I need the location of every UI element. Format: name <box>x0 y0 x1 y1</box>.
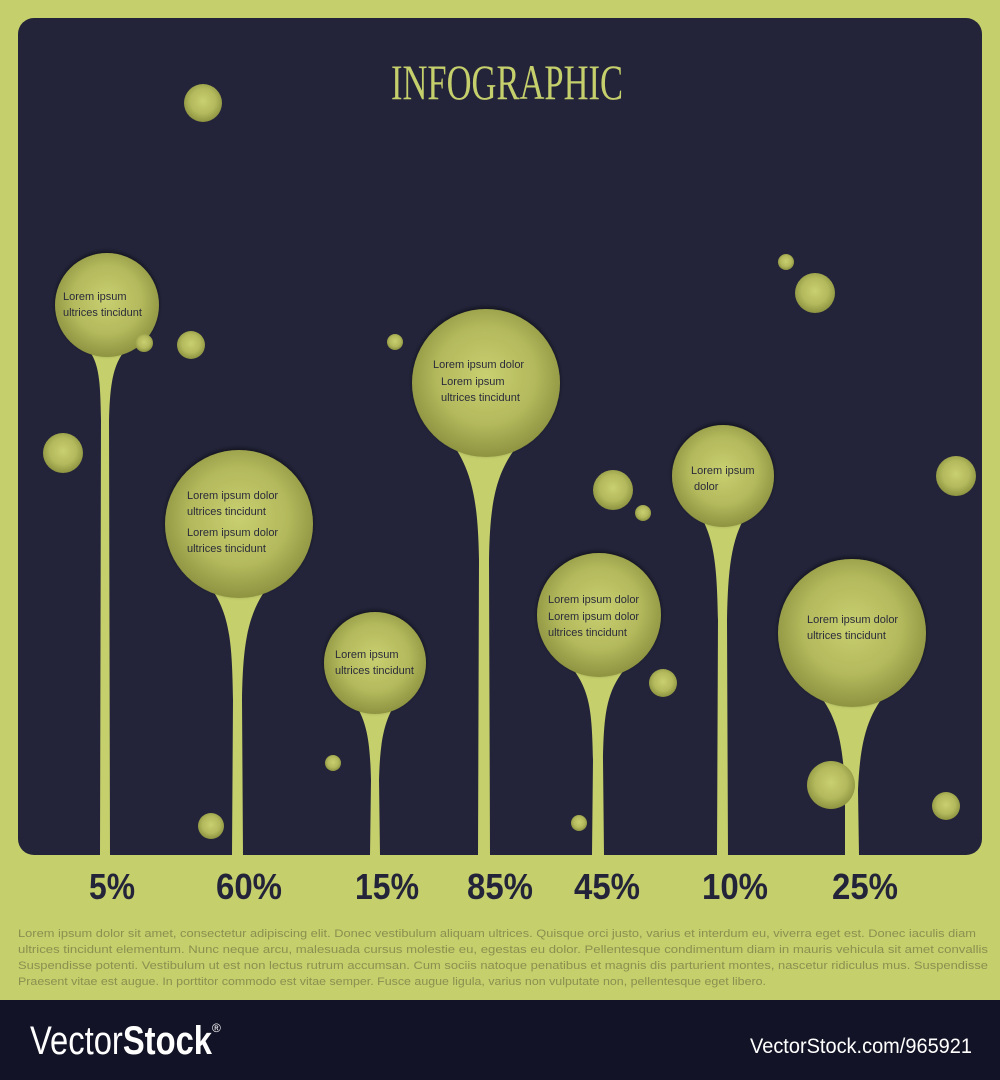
percentages: 45% <box>574 866 640 907</box>
bubble 1: Lorem ipsum <box>63 291 127 303</box>
bubble 2: ultrices tincidunt <box>187 506 266 518</box>
bubble 4: Lorem ipsum <box>441 376 505 388</box>
footer: VectorStock <box>30 1019 213 1063</box>
title: INFOGRAPHIC <box>391 54 623 110</box>
footer <box>0 1000 1000 1080</box>
bubble 2 <box>165 450 313 598</box>
bubble 7 <box>778 559 926 707</box>
body text: Lorem ipsum dolor sit amet, consectetur adipiscing elit. Donec vestibulum aliquam ultrices. Quisque orci justo, varius et interdum eu, viverra eget est. Donec iaculis diam <box>18 928 976 940</box>
bubble 3 <box>324 612 426 714</box>
bubble 4 <box>412 309 560 457</box>
bubble 5 <box>537 553 661 677</box>
bubble 4: Lorem ipsum dolor <box>433 359 524 371</box>
footer: VectorStock.com/965921 <box>750 1035 972 1058</box>
decorative dots <box>43 84 976 839</box>
percentages: 10% <box>702 866 768 907</box>
bubble 1 <box>55 253 159 357</box>
panel: dark chart area <box>18 18 982 855</box>
body text: ultrices tincidunt elementum. Nunc neque arcu, malesuada cursus molestie eu, egestas eu dolor. Pellentesque condimentum diam in mauris vehicula sit amet convallis <box>18 944 989 956</box>
bubble 7: ultrices tincidunt <box>807 630 886 642</box>
bubble 3: ultrices tincidunt <box>335 665 414 677</box>
percentages: 60% <box>216 866 282 907</box>
bubble 4: ultrices tincidunt <box>441 392 520 404</box>
bubble 5: ultrices tincidunt <box>548 627 627 639</box>
percentages: 85% <box>467 866 533 907</box>
footer: ® <box>212 1021 221 1035</box>
bubble 5: Lorem ipsum dolor <box>548 594 639 606</box>
bubble 2: ultrices tincidunt <box>187 543 266 555</box>
bubble 6: dolor <box>694 481 719 493</box>
percentages: 15% <box>355 866 419 907</box>
body text: Praesent vitae est augue. In porttitor commodo est vitae semper. Fusce augue ligula, varius non vulputate non, pellentesque eget libero. <box>18 976 766 988</box>
bubble 5: Lorem ipsum dolor <box>548 611 639 623</box>
bubble 1: ultrices tincidunt <box>63 307 142 319</box>
stems <box>84 345 889 855</box>
percentages: 5% <box>89 866 135 907</box>
percentages <box>89 866 898 907</box>
bubble 2: Lorem ipsum dolor <box>187 490 278 502</box>
bubble 6: Lorem ipsum <box>691 465 755 477</box>
body text: Suspendisse potenti. Vestibulum ut est non lectus rutrum accumsan. Cum sociis natoque penatibus et magnis dis parturient montes, nascetur ridiculus mus. Suspendisse <box>18 960 988 972</box>
bubble 3: Lorem ipsum <box>335 649 399 661</box>
bubble 2: Lorem ipsum dolor <box>187 527 278 539</box>
body text <box>18 928 989 988</box>
bubble 7: Lorem ipsum dolor <box>807 614 898 626</box>
bubble 6 <box>672 425 774 527</box>
percentages: 25% <box>832 866 898 907</box>
